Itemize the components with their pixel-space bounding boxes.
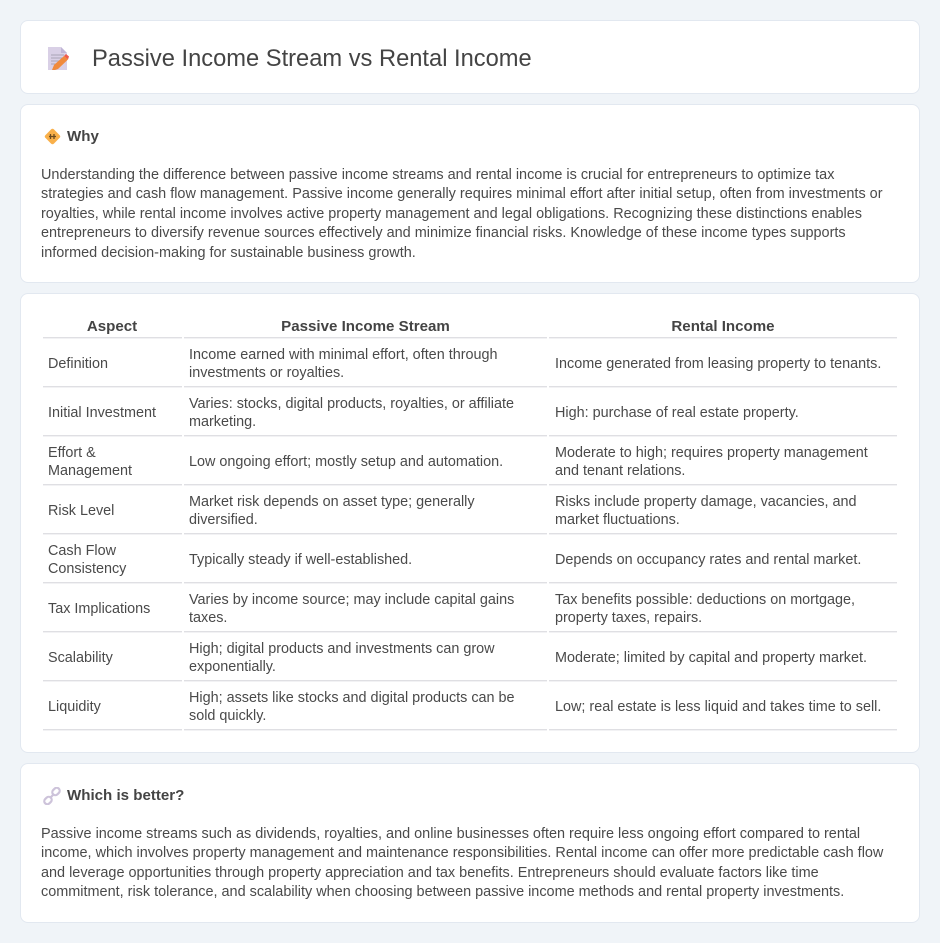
row: effort: Management	[48, 463, 132, 479]
text block: why paragraph	[41, 166, 883, 261]
text: diversified.	[189, 512, 258, 528]
row: cash flow	[48, 543, 126, 577]
table header: Passive Income Stream	[281, 318, 450, 335]
row: cash flow: Consistency	[48, 561, 126, 577]
text block: why paragraph: informed decision-making for sustainable business growth.	[41, 245, 416, 261]
text: Varies by income source; may include capital gains	[189, 592, 514, 608]
panel: comparison table	[20, 293, 920, 753]
text: Varies: stocks, digital products, royalties, or affiliate	[189, 396, 514, 412]
text block: which is better paragraph: and leverage opportunities through property appreciation and tax benefits. Entrepreneurs should evaluate factors like time	[41, 865, 819, 881]
table header: Aspect	[87, 318, 137, 335]
row: initial investment: Initial Investment	[48, 405, 156, 421]
text: sold quickly.	[189, 708, 266, 724]
text block: which is better paragraph	[41, 826, 884, 900]
table header: Rental Income	[671, 318, 775, 335]
text block: which is better paragraph: income, which involves property management and maintenance responsibilities. Rental income can offer more predictable cash flow	[41, 845, 883, 861]
panel: which is better	[20, 763, 920, 923]
text: exponentially.	[189, 659, 276, 675]
text: High; assets like stocks and digital products can be	[189, 690, 515, 706]
row: effort	[48, 445, 132, 479]
text: Typically steady if well-established.	[189, 552, 412, 568]
text: market fluctuations.	[555, 512, 680, 528]
text block: which is better paragraph: commitment, risk tolerance, and scalability when choosing between passive income methods and rental property investments.	[41, 884, 844, 900]
text: Income generated from leasing property to tenants.	[555, 356, 881, 372]
row: liquidity: Liquidity	[48, 699, 101, 715]
text: Depends on occupancy rates and rental market.	[555, 552, 861, 568]
text: High: purchase of real estate property.	[555, 405, 799, 421]
text block: why paragraph: royalties, while rental income involves active property management and legal obligations. Recognizing these distinctions enables	[41, 206, 862, 222]
text: Tax benefits possible: deductions on mortgage,	[555, 592, 855, 608]
text: and tenant relations.	[555, 463, 685, 479]
text block: why paragraph: Understanding the difference between passive income streams and rental income is crucial for entrepreneurs to optimize tax	[41, 166, 834, 182]
text: property taxes, repairs.	[555, 610, 702, 626]
text block: why paragraph: strategies and cash flow management. Passive income generally requires minimal effort after initial setup, often from investments or	[41, 186, 883, 202]
panel: why	[20, 104, 920, 283]
row: tax: Tax Implications	[48, 601, 150, 617]
table header	[87, 318, 775, 335]
row: risk: Risk Level	[48, 503, 114, 519]
text: Low; real estate is less liquid and takes time to sell.	[555, 699, 881, 715]
row: definition: Definition	[48, 356, 108, 372]
heading: which is better: Which is better?	[67, 787, 184, 804]
text: Market risk depends on asset type; generally	[189, 494, 475, 510]
title: Passive Income Stream vs Rental Income	[92, 46, 532, 72]
text: marketing.	[189, 414, 256, 430]
text: Risks include property damage, vacancies, and	[555, 494, 857, 510]
icon: warning diamond	[44, 128, 60, 144]
row: scalability: Scalability	[48, 650, 113, 666]
text block: why paragraph: entrepreneurs to diversify revenue sources effectively and minimize financial risks. Knowledge of these income types supports	[41, 225, 846, 241]
panel: title card	[20, 20, 920, 94]
icon: document with pencil	[48, 47, 69, 70]
text: Income earned with minimal effort, often through	[189, 347, 498, 363]
text: Moderate to high; requires property management	[555, 445, 868, 461]
text: Moderate; limited by capital and property market.	[555, 650, 867, 666]
row: effort: Effort &	[48, 445, 96, 461]
text: High; digital products and investments can grow	[189, 641, 495, 657]
row: cash flow: Cash Flow	[48, 543, 116, 559]
text: Low ongoing effort; mostly setup and automation.	[189, 454, 503, 470]
text: investments or royalties.	[189, 365, 344, 381]
text: taxes.	[189, 610, 227, 626]
icon: chain link	[43, 787, 61, 805]
text block: which is better paragraph: Passive income streams such as dividends, royalties, and online businesses often require less ongoing effort compared to rental	[41, 826, 860, 842]
heading: why: Why	[67, 128, 99, 145]
